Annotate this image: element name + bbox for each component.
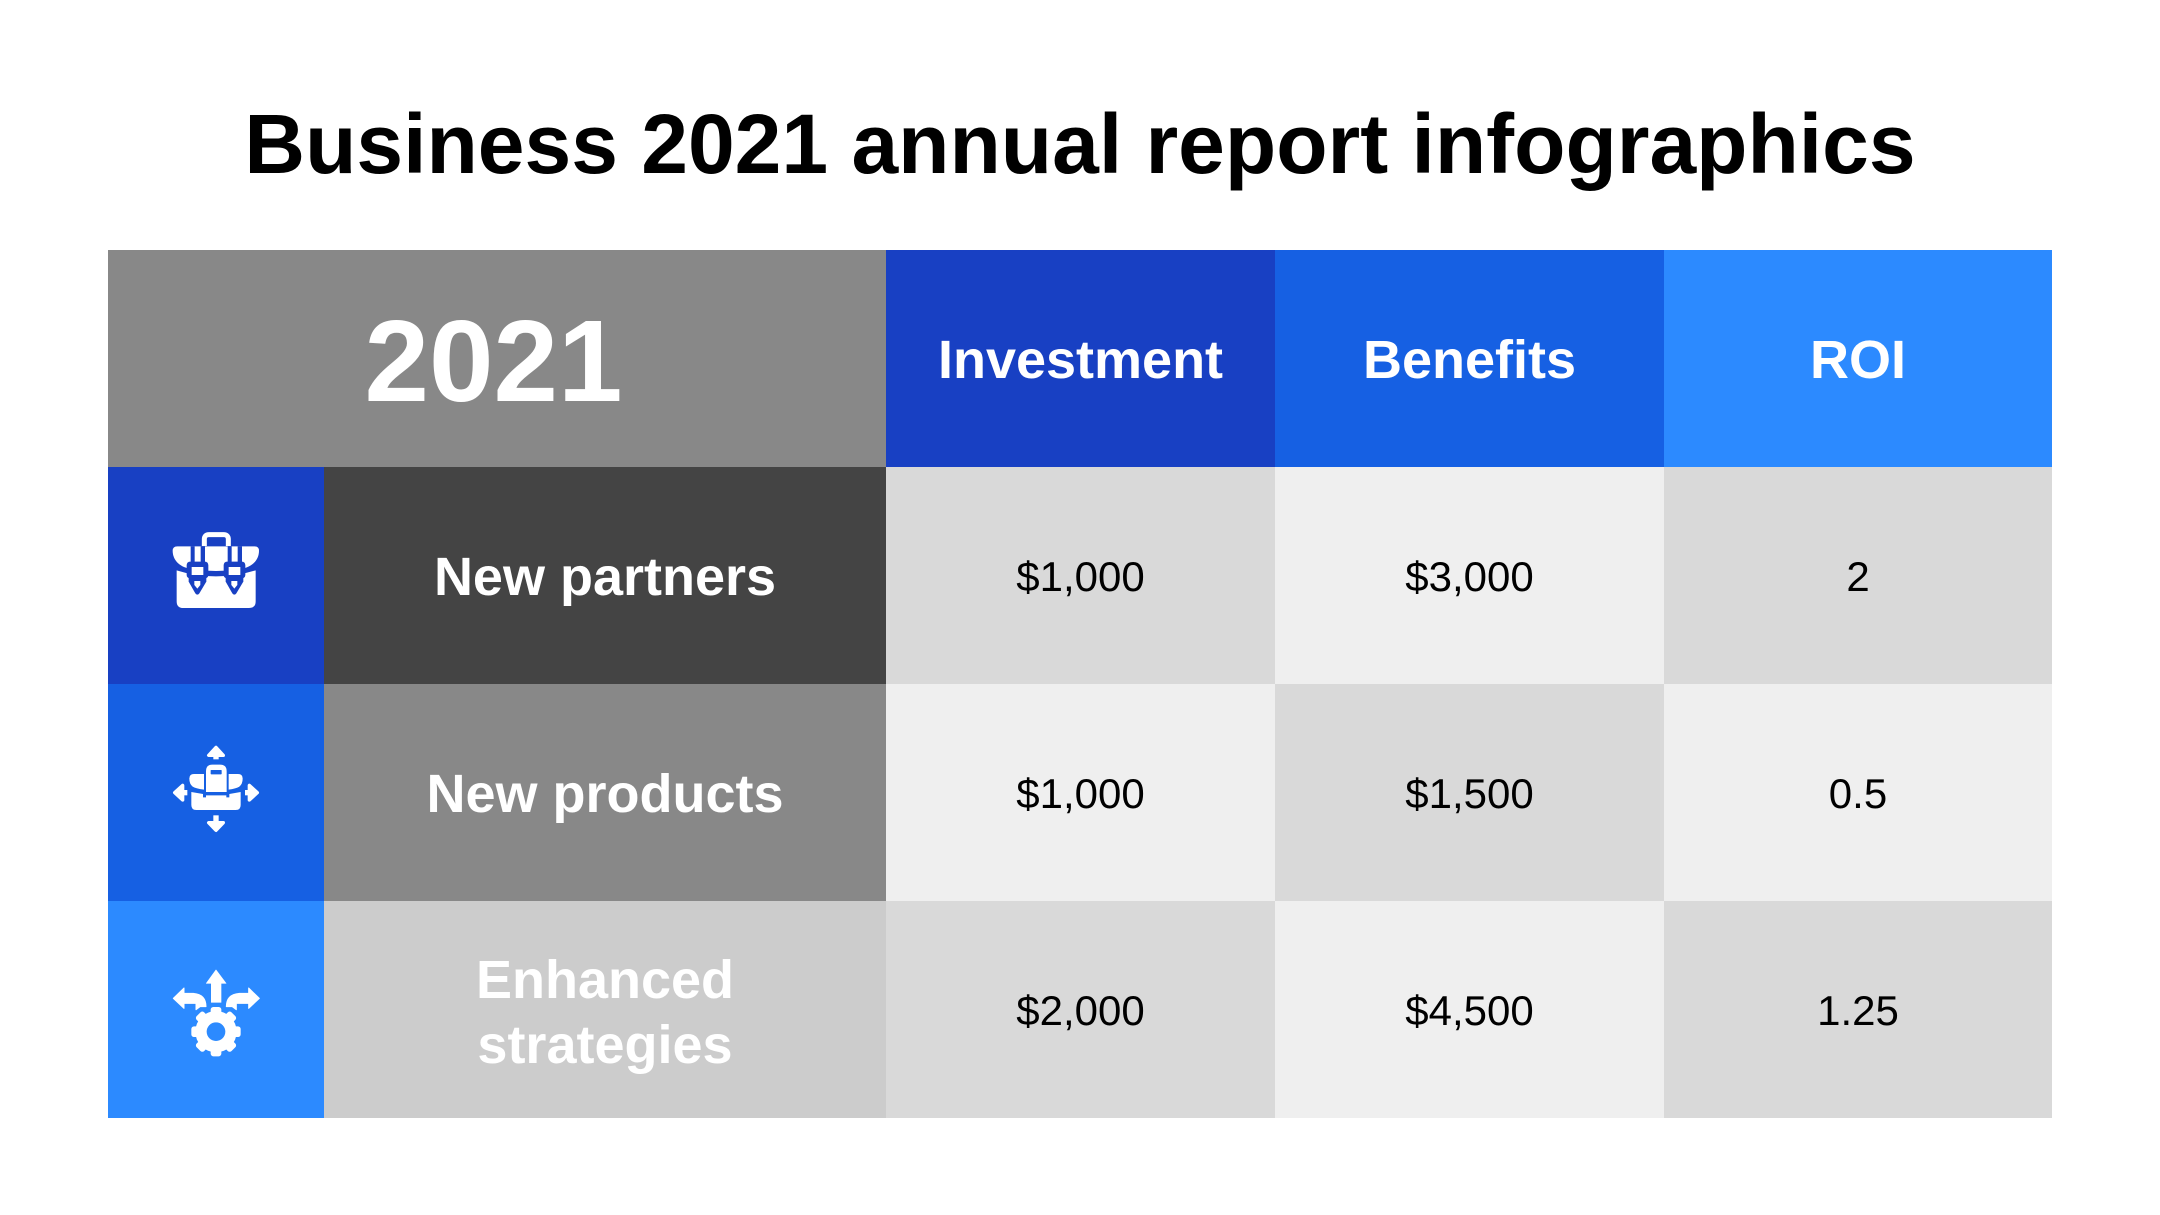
row label: New partners: New partners xyxy=(434,546,776,606)
row label: New partners xyxy=(324,467,886,684)
column header: ROI: ROI xyxy=(1810,330,1906,390)
row label: New products: New products xyxy=(426,764,784,824)
value: row 2 investment xyxy=(886,684,1275,901)
value: row 3 investment: $2,000 xyxy=(1016,987,1145,1034)
column header: Investment xyxy=(886,250,1275,467)
column header: ROI xyxy=(1664,250,2052,467)
row label: New products xyxy=(324,684,886,901)
column header: Benefits: Benefits xyxy=(1363,330,1576,390)
value: row 3 benefits: $4,500 xyxy=(1405,987,1534,1034)
column header: Investment: Investment xyxy=(938,330,1223,390)
value: row 3 investment xyxy=(886,901,1275,1118)
icon: briefcase with four arrows xyxy=(175,747,257,830)
value: row 2 ROI xyxy=(1664,684,2052,901)
value: row 1 investment xyxy=(886,467,1275,684)
icon: gear with three arrows xyxy=(173,970,259,1056)
value: row 3 ROI: 1.25 xyxy=(1817,987,1899,1034)
title: Business 2021 annual report infographics xyxy=(244,96,1916,190)
value: row 3 benefits xyxy=(1275,901,1664,1118)
row label: Enhanced strategies xyxy=(324,901,886,1118)
value: row 2 ROI: 0.5 xyxy=(1829,770,1887,817)
icon cell: row 2 xyxy=(108,684,324,901)
icon: briefcase xyxy=(173,535,259,608)
year header xyxy=(108,250,886,467)
row label: Enhanced strategies: strategies xyxy=(477,1014,733,1074)
icon cell: row 1 xyxy=(108,467,324,684)
value: row 1 benefits xyxy=(1275,467,1664,684)
value: row 1 ROI: 2 xyxy=(1846,553,1870,600)
value: row 3 ROI xyxy=(1664,901,2052,1118)
value: row 1 ROI xyxy=(1664,467,2052,684)
value: row 2 benefits xyxy=(1275,684,1664,901)
value: row 1 benefits: $3,000 xyxy=(1405,553,1534,600)
value: row 1 investment: $1,000 xyxy=(1016,553,1145,600)
icon cell: row 3 xyxy=(108,901,324,1118)
value: row 2 investment: $1,000 xyxy=(1016,770,1145,817)
row label: Enhanced strategies: Enhanced xyxy=(476,950,734,1010)
value: row 2 benefits: $1,500 xyxy=(1405,770,1534,817)
column header: Benefits xyxy=(1275,250,1664,467)
year header: 2021 xyxy=(364,296,623,426)
